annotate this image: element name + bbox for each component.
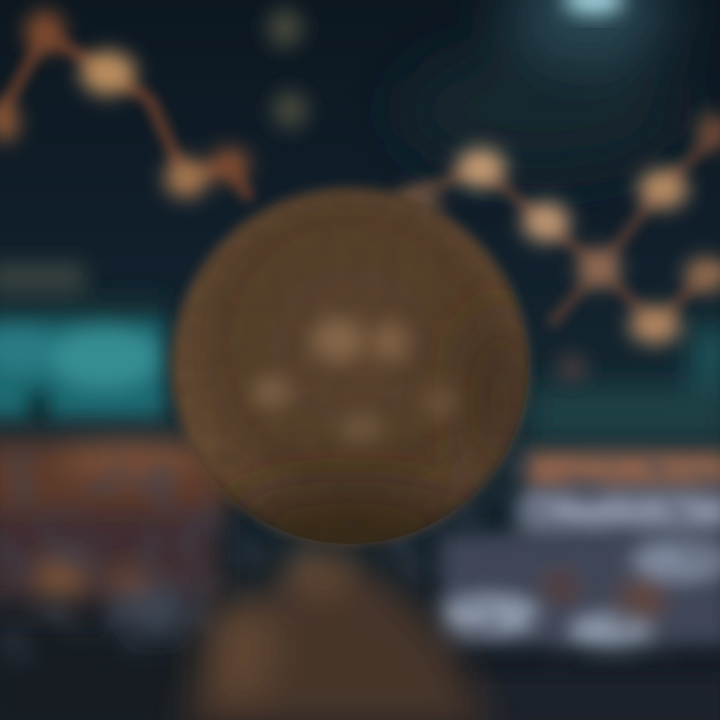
- coin disc: [172, 188, 528, 544]
- body below the coin: [185, 552, 490, 720]
- panel: teal band right: [530, 325, 720, 440]
- coin: [170, 185, 530, 559]
- ground: pale right: [440, 452, 720, 720]
- ground texture: [3, 452, 718, 661]
- ground: brown left: [0, 438, 230, 720]
- chart markers: [0, 8, 720, 381]
- light source: [564, 0, 624, 14]
- coin shadow: [220, 310, 526, 559]
- glow: top-right light: [400, 0, 680, 170]
- chart line: right: [400, 125, 720, 325]
- chart line: left: [0, 35, 250, 200]
- coin texture: [223, 456, 224, 458]
- coin face details: [252, 318, 458, 442]
- panel: teal band left: [0, 262, 165, 424]
